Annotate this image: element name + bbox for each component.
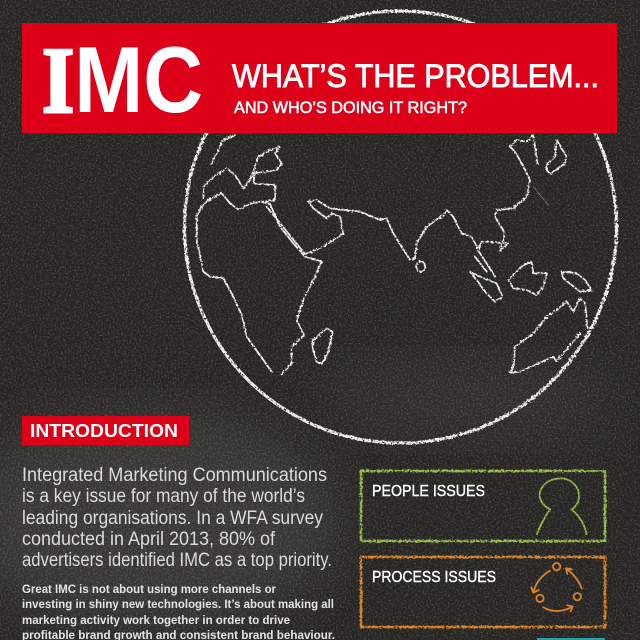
intro body text: investing in shiny new technologies. It’s about making all xyxy=(22,597,334,611)
IMC title: IMC xyxy=(42,27,203,133)
New Guinea and islands xyxy=(562,272,592,292)
panel: process issues: PROCESS ISSUES xyxy=(372,569,496,586)
chalk globe xyxy=(184,11,616,443)
Sri Lanka xyxy=(416,261,425,272)
sub headline: AND WHO’S DOING IT RIGHT? xyxy=(234,98,467,117)
intro paragraph: conducted in April 2013, 80% of xyxy=(22,529,276,550)
panel: next section edge xyxy=(537,638,605,640)
Borneo xyxy=(508,262,547,295)
icon: process cycle xyxy=(531,563,582,611)
continents xyxy=(197,135,592,374)
header banner xyxy=(22,23,617,133)
intro paragraph xyxy=(22,465,332,571)
Africa xyxy=(197,193,322,374)
Europe and Mediterranean xyxy=(203,135,282,202)
panel: people issues xyxy=(361,471,605,541)
Arabia and South Asia coast xyxy=(267,135,537,260)
intro paragraph: is a key issue for many of the world’s xyxy=(22,486,305,507)
introduction heading xyxy=(22,416,189,445)
Australia xyxy=(510,298,587,373)
intro paragraph: Integrated Marketing Communications xyxy=(22,465,327,486)
globe outline xyxy=(184,11,616,443)
Sumatra xyxy=(470,272,503,302)
intro body text: Great IMC is not about using more channels or xyxy=(22,582,276,596)
intro paragraph: leading organisations. In a WFA survey xyxy=(22,508,323,529)
intro body text xyxy=(22,582,335,640)
panel: people issues: PEOPLE ISSUES xyxy=(372,483,485,500)
intro body text: marketing activity work together in order to drive xyxy=(22,613,290,627)
icon: person xyxy=(537,478,587,535)
headline: WHAT’S THE PROBLEM... xyxy=(232,58,599,94)
introduction heading: INTRODUCTION xyxy=(30,421,178,441)
intro paragraph: advertisers identified IMC as a top priority. xyxy=(22,550,332,571)
Japan xyxy=(547,140,567,174)
Malay peninsula xyxy=(475,248,495,277)
Madagascar xyxy=(312,328,333,364)
panel: process issues xyxy=(361,557,605,627)
